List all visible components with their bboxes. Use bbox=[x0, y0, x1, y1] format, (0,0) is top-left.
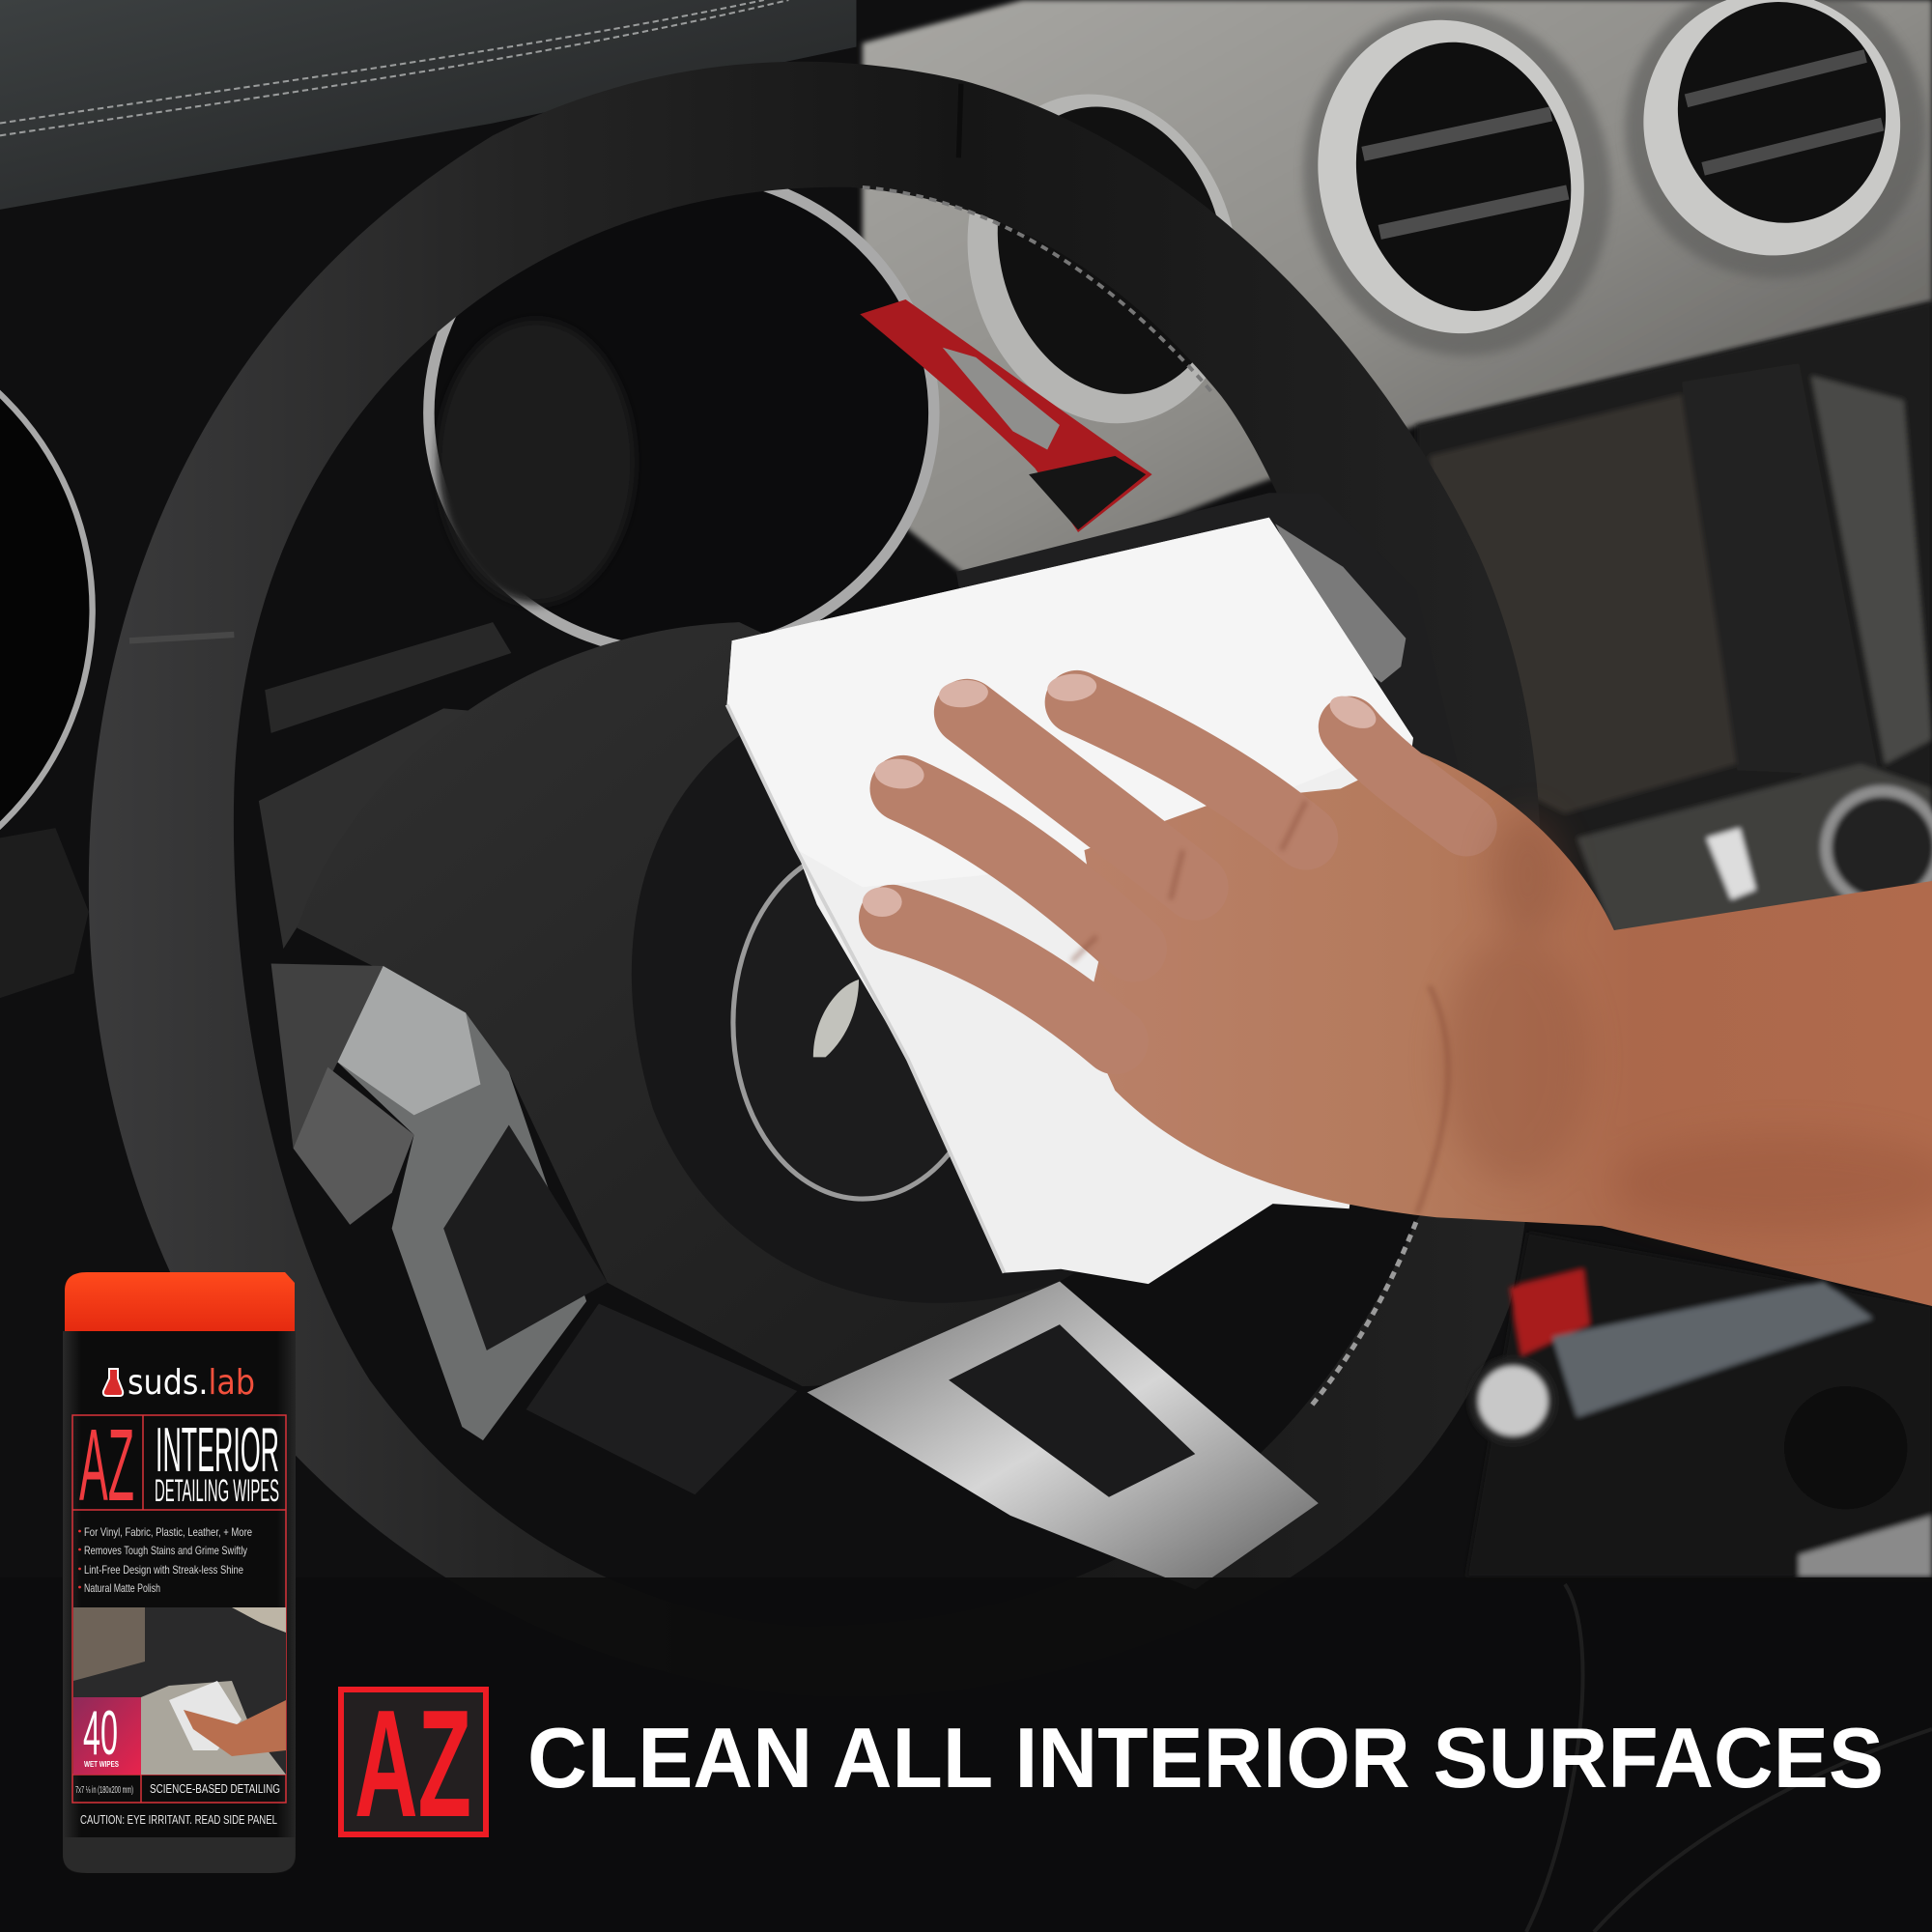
benefit bullets: For Vinyl, Fabric, Plastic, Leather, + More bbox=[84, 1525, 252, 1539]
caution text: CAUTION: EYE IRRITANT. READ SIDE PANEL bbox=[80, 1812, 277, 1827]
lower control buttons bbox=[526, 1303, 797, 1494]
benefit bullets: Removes Tough Stains and Grime Swiftly bbox=[84, 1544, 247, 1557]
AZ badge: AZ bbox=[355, 1679, 471, 1849]
size text: 7x7 ⅛ in (180x200 mm) bbox=[75, 1785, 133, 1796]
lower right console bbox=[1466, 1233, 1932, 1577]
product: wipes canister bbox=[63, 1272, 296, 1874]
red lid bbox=[65, 1272, 295, 1331]
lower right screen and trim bbox=[1417, 301, 1932, 936]
science tagline: SCIENCE-BASED DETAILING bbox=[150, 1781, 280, 1796]
dashboard silver panel bbox=[863, 0, 1932, 591]
silver lower spoke bbox=[807, 1282, 1319, 1589]
wipe count badge bbox=[73, 1697, 141, 1775]
headline: CLEAN ALL INTERIOR SURFACES bbox=[527, 1710, 1884, 1805]
brand name: suds.lab bbox=[128, 1363, 255, 1403]
skin shading bbox=[1441, 813, 1932, 1233]
white wipe bbox=[727, 518, 1413, 1284]
silver lower left spoke bbox=[271, 963, 608, 1440]
benefit bullets: Natural Matte Polish bbox=[84, 1581, 160, 1595]
wipe count badge: 40 bbox=[83, 1697, 118, 1768]
product: wipes canister: AZ bbox=[79, 1408, 134, 1522]
air vent centre bbox=[1271, 0, 1643, 384]
canister bottom band bbox=[64, 1837, 295, 1873]
hand and arm bbox=[863, 672, 1932, 1306]
air vent left bbox=[933, 65, 1272, 452]
left gauge bbox=[0, 312, 93, 908]
fingernails bbox=[863, 672, 1381, 917]
flask icon bbox=[103, 1369, 123, 1396]
faint cables in band bbox=[1526, 1584, 1932, 1932]
fingers bbox=[892, 702, 1466, 1041]
canister body bbox=[63, 1331, 296, 1874]
brand logo bbox=[103, 1363, 255, 1403]
red shift paddle bbox=[860, 299, 1152, 532]
hub airbag cover bbox=[297, 622, 1233, 1386]
air vent right bbox=[1593, 0, 1932, 310]
right gauge cluster bbox=[429, 173, 934, 653]
steering wheel rim bbox=[89, 62, 1542, 1697]
infographic canvas: INTERIOR bbox=[156, 1414, 279, 1485]
leather dash top bbox=[0, 0, 856, 210]
product: wipes canister: DETAILING WIPES bbox=[155, 1473, 279, 1508]
AZ badge bbox=[341, 1679, 486, 1849]
left spoke bbox=[259, 708, 518, 949]
forearm and palm bbox=[1084, 752, 1932, 1306]
benefit bullets: Lint-Free Design with Streak-less Shine bbox=[84, 1563, 243, 1577]
grey spoke button bbox=[1275, 524, 1406, 683]
stalk bbox=[0, 828, 89, 998]
label photo bbox=[73, 1607, 286, 1775]
creases bbox=[1072, 801, 1448, 1213]
bottom dark band bbox=[0, 1577, 1932, 1932]
wheel upper right spoke bbox=[956, 493, 1466, 801]
benefit bullets bbox=[78, 1525, 252, 1595]
left dash trim bbox=[265, 622, 511, 733]
label frame bbox=[72, 1415, 286, 1803]
wipe count badge: WET WIPES bbox=[84, 1760, 120, 1769]
